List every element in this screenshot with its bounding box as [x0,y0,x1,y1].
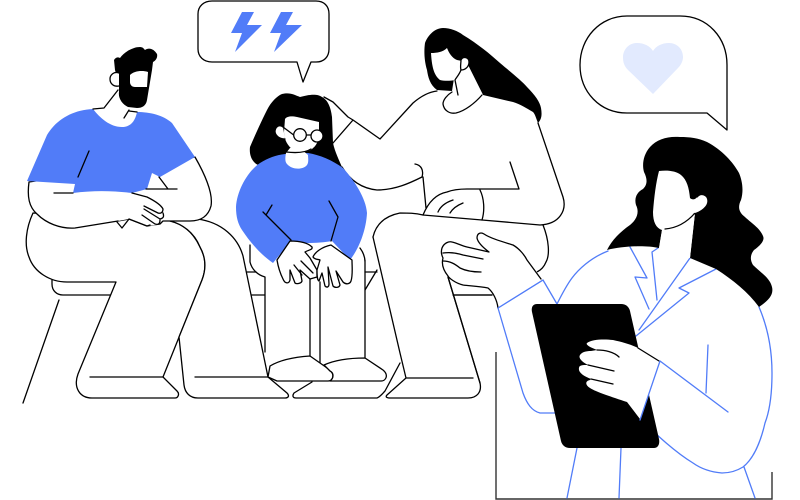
man legs [26,213,288,398]
doctor coat skirt lines [567,448,755,498]
speech bubble: stress [198,1,329,82]
icon: lightning bolts [231,12,302,52]
woman lower hand [423,162,519,220]
doctor lapels [630,247,716,336]
girl blue sweater [236,153,367,263]
girl right hand [313,245,352,287]
girl [236,93,400,398]
doctor tablet [532,304,659,448]
girl left shoe [268,356,333,381]
bench [23,270,492,403]
girl left hand [277,241,317,284]
woman torso [324,80,565,225]
icon: heart [623,43,683,94]
girl hair [250,93,342,167]
woman foot strip [293,363,400,398]
girl ear [275,126,285,139]
girl sweater lines [263,201,338,241]
girl face [284,116,319,152]
doctor ear [690,194,708,214]
speech bubble: heart [580,16,727,130]
woman face and neck [431,48,483,113]
girl glasses [283,127,323,142]
doctor cuff and sleeve [640,345,728,420]
woman seated [324,28,565,398]
doctor hair [607,137,772,307]
man hand [118,193,163,226]
doctor [441,137,772,499]
patient hand [441,233,543,383]
woman hair [424,28,542,123]
girl right shoe [324,358,386,381]
doctor face and neck [653,171,702,258]
doctor hand on tablet [579,339,660,419]
man head [93,47,157,118]
desk frame [496,352,772,499]
man blue t-shirt [27,109,195,193]
man ear [110,72,119,86]
woman legs [373,216,548,398]
doctor coat [498,246,772,473]
man shirt and arm lines [54,151,177,193]
man [26,47,288,398]
girl pants [265,277,365,358]
girl collar and neck [285,148,308,169]
woman ear [461,58,469,70]
man arm and torso outline [28,157,211,228]
